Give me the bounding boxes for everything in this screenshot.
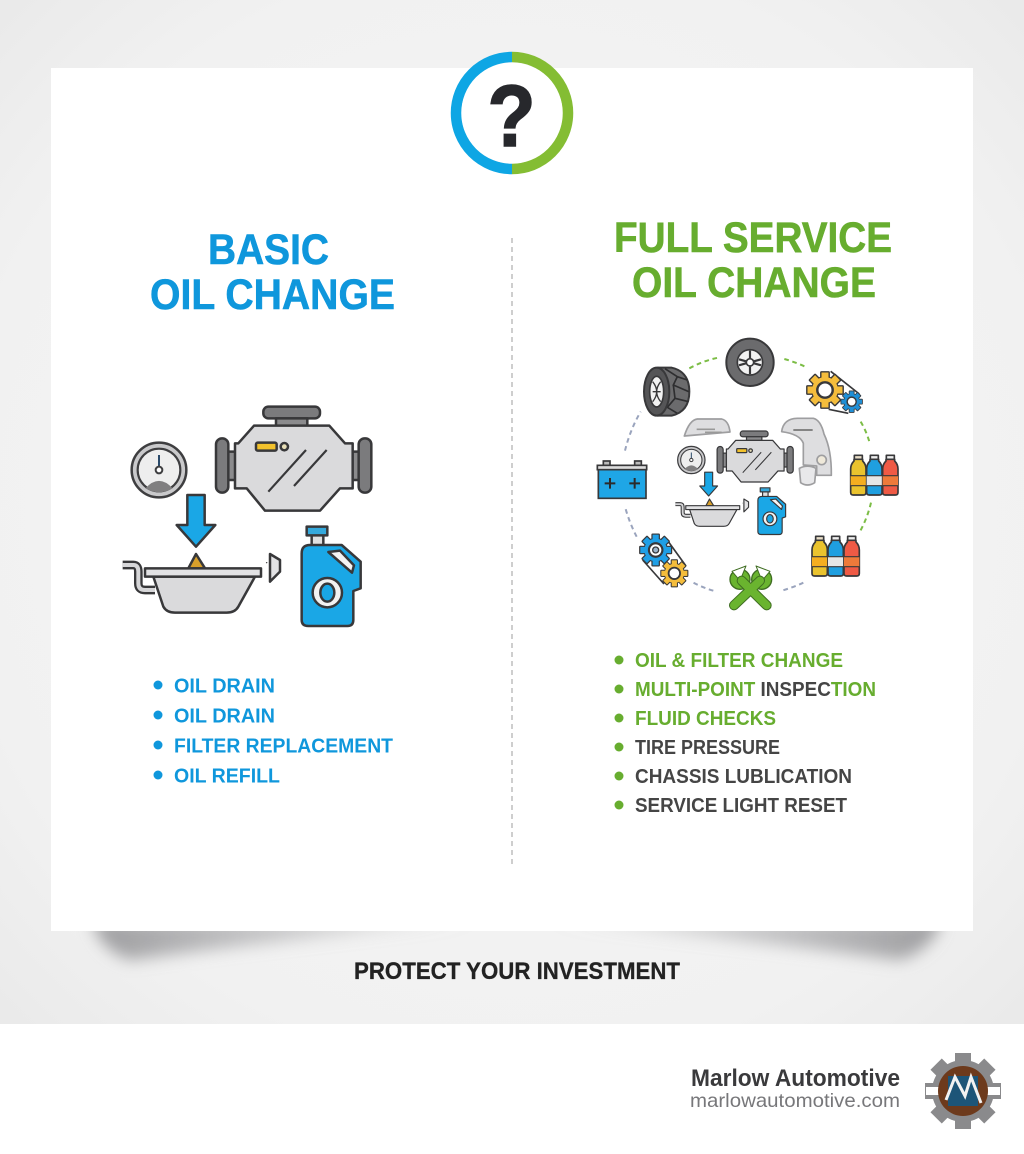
brand name and url — [690, 1065, 900, 1112]
heading: basic oil change: OIL CHANGE — [150, 271, 395, 319]
heading: full service oil change — [614, 214, 892, 307]
icon: crossed wrenches — [730, 566, 772, 605]
list: basic services: OIL DRAIN — [174, 674, 275, 698]
icon: small arrow — [700, 472, 718, 496]
icon: grey car body — [782, 418, 831, 485]
logo: gear badge — [925, 1053, 1001, 1129]
icon: small oil jug — [758, 488, 786, 534]
icon: oil jug — [302, 527, 361, 626]
icon: gauge — [132, 443, 186, 497]
dashed ring — [625, 358, 871, 591]
illustration: basic oil change icons — [123, 407, 371, 626]
icon: front tire — [726, 339, 774, 386]
question mark badge — [456, 57, 568, 169]
list: full service items — [614, 649, 876, 817]
list: full service items: OIL & FILTER CHANGE — [635, 649, 843, 672]
brand name and url: Marlow Automotive — [691, 1065, 900, 1092]
icon: side tire — [644, 368, 689, 416]
illustration: full service icon ring — [597, 339, 898, 605]
icon: small engine — [717, 431, 793, 482]
list: full service items: CHASSIS LUBLICATION — [635, 765, 852, 788]
list: full service items: SERVICE LIGHT RESET — [635, 794, 847, 817]
list: basic services — [154, 674, 393, 788]
footer band — [0, 1024, 1024, 1154]
heading: basic oil change — [150, 226, 395, 319]
question mark badge: ? — [488, 68, 536, 165]
icon: gears top right — [807, 371, 862, 413]
icon: engine — [216, 407, 371, 511]
heading: full service oil change: FULL SERVICE — [614, 214, 892, 262]
icon: down arrow — [177, 495, 215, 547]
card shadow — [92, 920, 942, 960]
brand name and url: marlowautomotive.com — [690, 1090, 900, 1112]
dashed centre divider — [511, 238, 513, 868]
icon: gears lower left — [640, 535, 687, 586]
icon: grey hood — [684, 419, 730, 436]
icon: small oil pan — [675, 499, 749, 526]
icon: oil pan — [123, 554, 280, 613]
list: full service items: FLUID CHECKS — [635, 707, 776, 730]
icon: fluid bottles lower — [812, 536, 859, 576]
list: basic services: OIL REFILL — [174, 764, 280, 788]
list: basic services: FILTER REPLACEMENT — [174, 734, 393, 758]
list: full service items: TIRE PRESSURE — [635, 736, 780, 759]
tagline: PROTECT YOUR INVESTMENT — [354, 958, 680, 985]
heading: full service oil change: OIL CHANGE — [632, 259, 876, 307]
list: basic services: OIL DRAIN — [174, 704, 275, 728]
white card panel — [51, 68, 973, 931]
icon: battery — [597, 461, 647, 498]
heading: basic oil change: BASIC — [208, 226, 329, 274]
icon: small gauge — [678, 446, 705, 474]
icon: fluid bottles right — [851, 455, 898, 495]
list: full service items: MULTI-POINT INSPECTION — [635, 678, 876, 701]
